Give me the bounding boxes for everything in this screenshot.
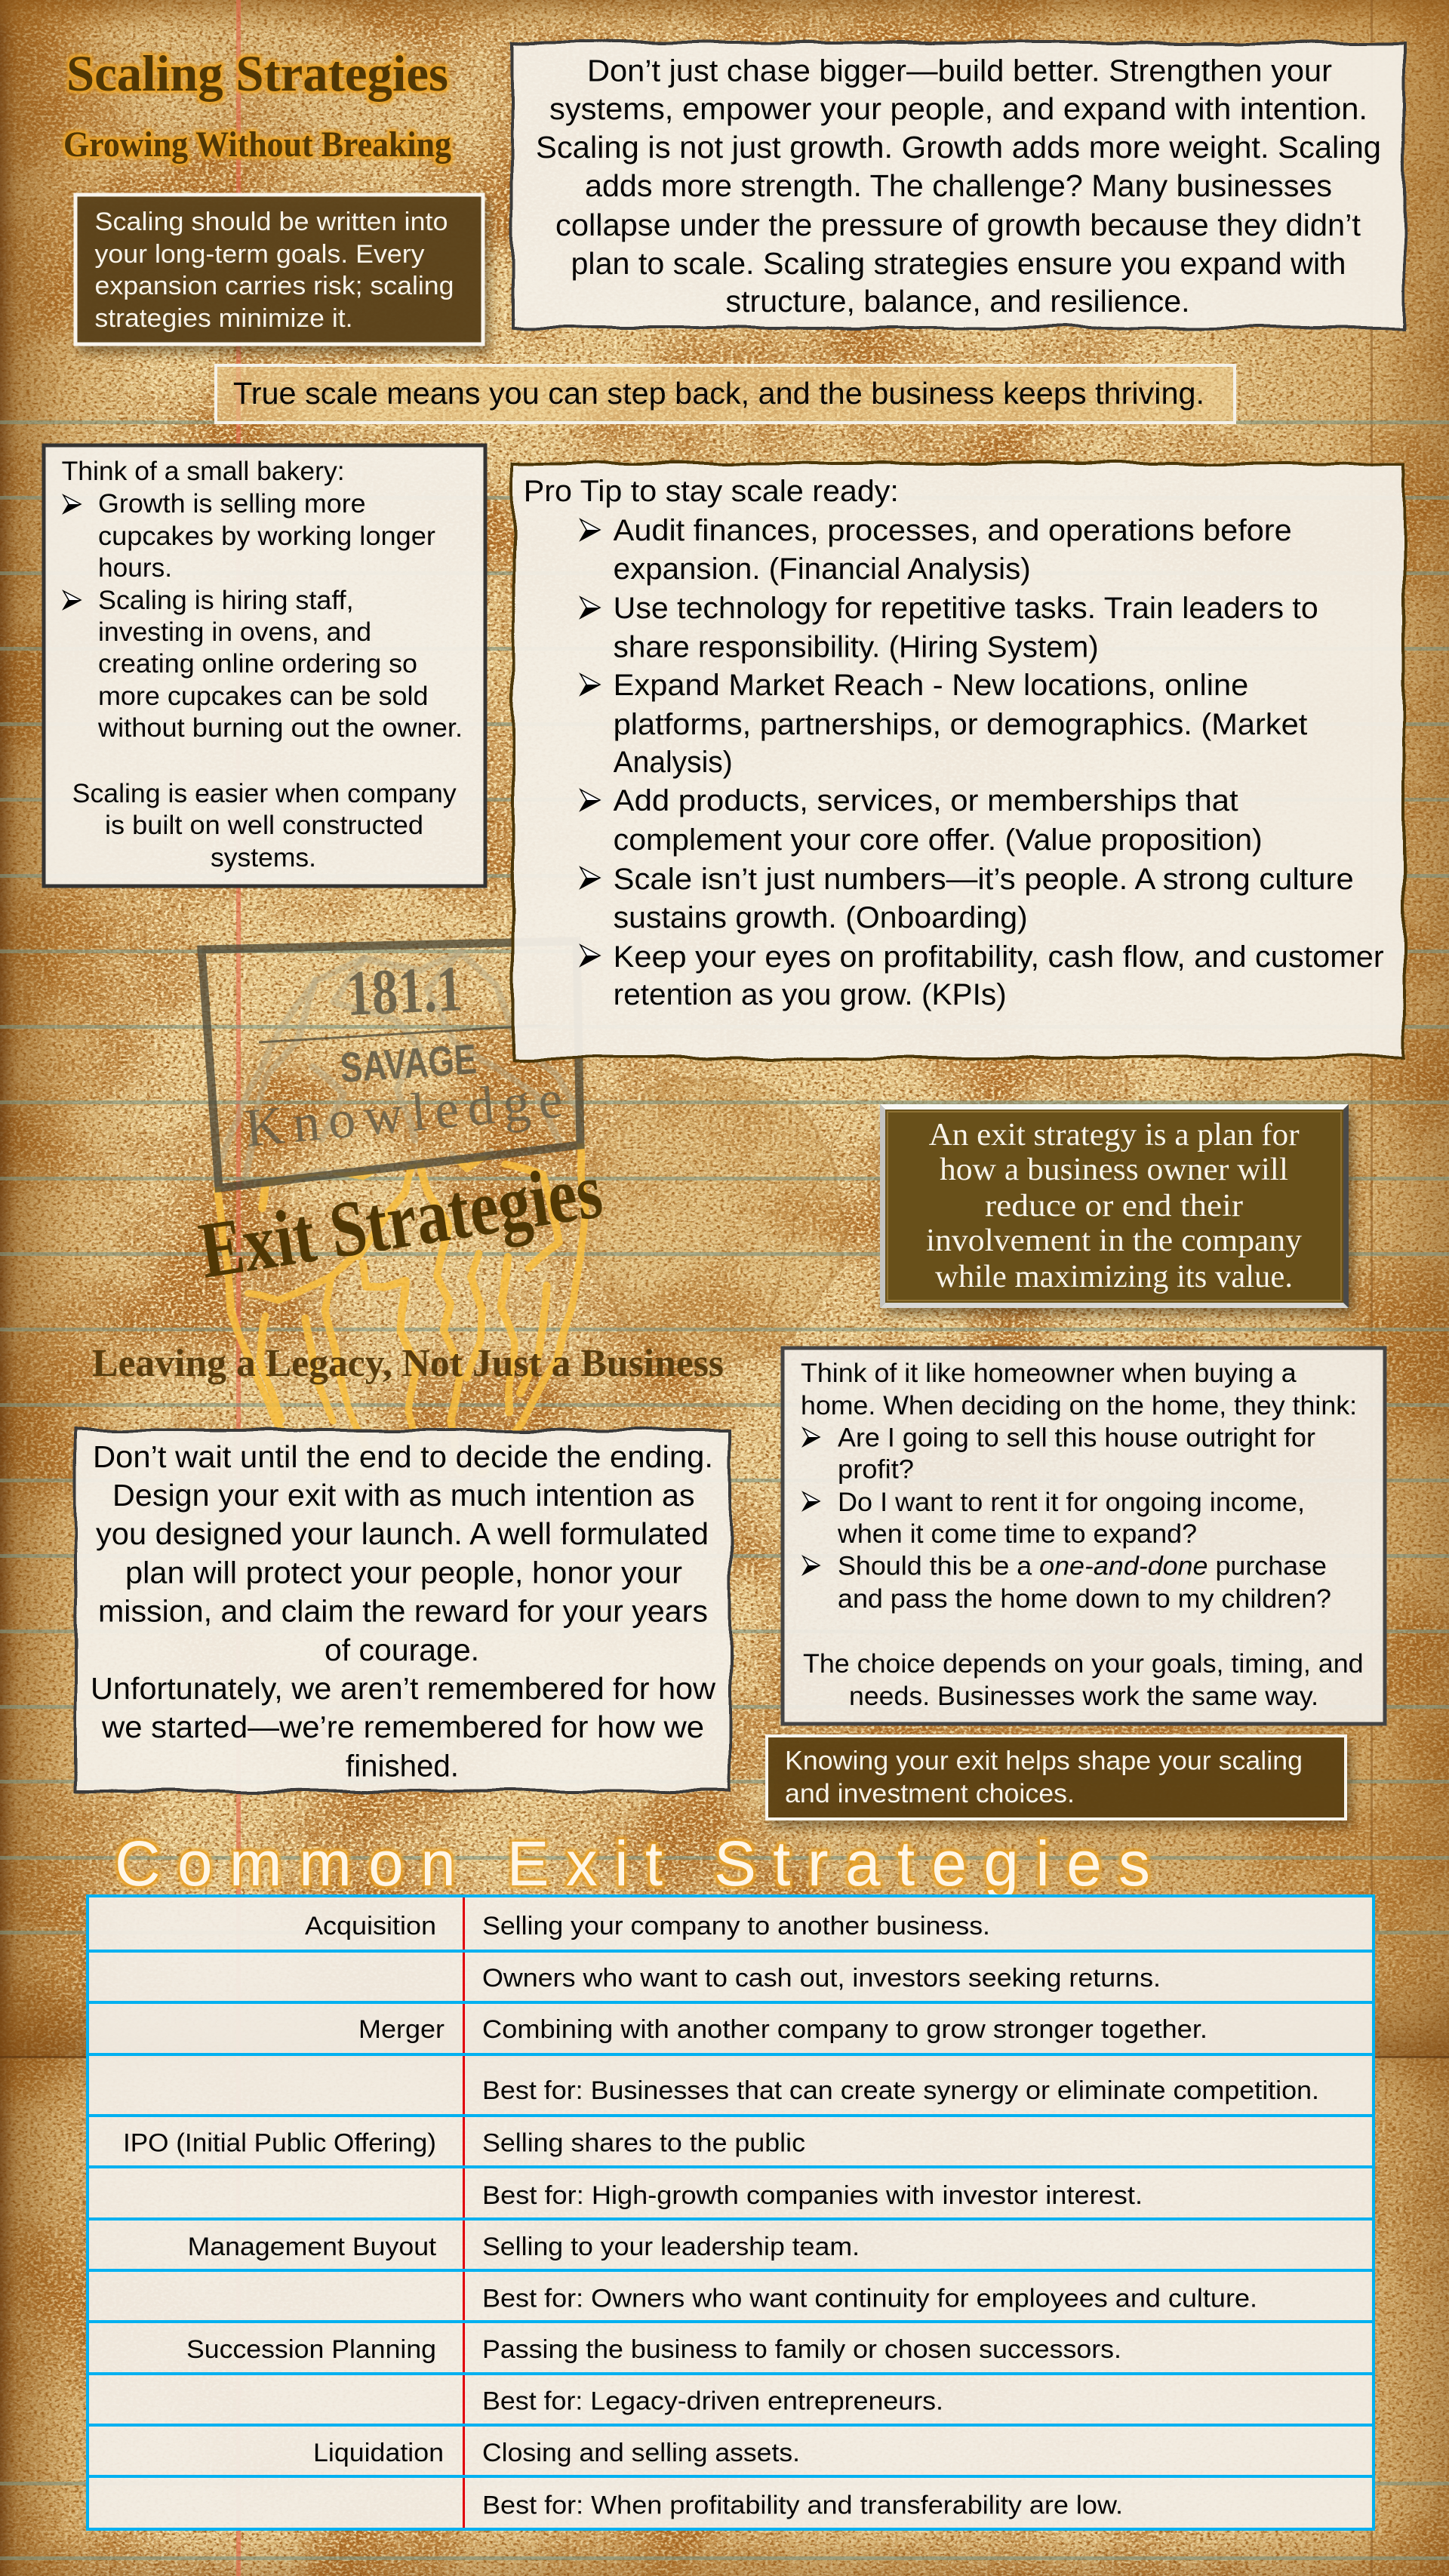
icon: brain <box>217 953 586 1472</box>
panel: intro text: systems, empower your people, and expand with intention. <box>549 91 1367 126</box>
panel: pro tip: retention as you grow. (KPIs) <box>614 978 1007 1011</box>
row: Management Buyout: Best for: Owners who want continuity for employees and culture. <box>482 2284 1257 2313</box>
panel: pro tip: sustains growth. (Onboarding) <box>614 901 1028 934</box>
title: Scaling Strategies: Scaling Strategies <box>66 45 448 102</box>
panel: homeowner analogy: needs. Businesses work the same way. <box>849 1682 1318 1711</box>
panel: intro text: plan to scale. Scaling strategies ensure you expand with <box>571 246 1346 281</box>
callout: exit strategy definition <box>880 1104 1349 1308</box>
coffee stain <box>583 1076 843 1362</box>
row: Acquisition: Owners who want to cash out, investors seeking returns. <box>482 1964 1161 1993</box>
panel: design your exit <box>75 1430 730 1791</box>
row: IPO: Best for: High-growth companies with investor interest. <box>482 2181 1143 2210</box>
row: IPO: IPO (Initial Public Offering) <box>123 2129 436 2158</box>
panel: pro tip: Analysis) <box>614 746 733 779</box>
icon: arrow bullet <box>580 519 600 540</box>
callout: scaling long-term goals: Scaling should be written into <box>95 208 448 236</box>
panel: design your exit: you designed your launch. A well formulated <box>96 1516 709 1551</box>
row: Management Buyout <box>188 2233 1257 2313</box>
panel: bakery example: cupcakes by working longer <box>98 522 435 551</box>
row: Merger: Best for: Businesses that can create synergy or eliminate competition. <box>482 2076 1319 2105</box>
icon: arrow bullet <box>803 1556 820 1574</box>
paper creases <box>762 0 1275 2574</box>
panel: bakery example: is built on well constructed <box>105 811 423 840</box>
panel: intro text: structure, balance, and resilience. <box>726 284 1189 319</box>
icon: arrow bullet <box>580 789 600 811</box>
panel: pro tip: share responsibility. (Hiring System) <box>614 631 1099 664</box>
panel: homeowner analogy: and pass the home down to my children? <box>838 1584 1331 1614</box>
panel: bakery example: Growth is selling more <box>98 489 366 519</box>
panel: bakery example: without burning out the owner. <box>97 713 463 743</box>
panel: homeowner analogy <box>783 1348 1385 1724</box>
callout: knowing your exit: Knowing your exit helps shape your scaling <box>785 1747 1303 1776</box>
row: Succession Planning: Succession Planning <box>186 2335 436 2364</box>
row: Succession Planning <box>186 2335 1121 2416</box>
subtitle: Growing Without Breaking: Growing Without Breaking <box>63 125 451 165</box>
panel: intro text: Don’t just chase bigger—build better. Strengthen your <box>587 53 1332 88</box>
panel: homeowner analogy: Think of it like homeowner when buying a <box>801 1359 1297 1388</box>
panel: design your exit: of courage. <box>325 1633 479 1667</box>
row: Liquidation: Best for: When profitability and transferability are low. <box>482 2491 1123 2520</box>
stamp: 181.1 Savage Knowledge: 181.1 <box>345 952 464 1029</box>
panel: pro tip: expansion. (Financial Analysis) <box>614 552 1031 586</box>
panel: intro text: adds more strength. The challenge? Many businesses <box>585 168 1332 203</box>
vertical fold <box>1371 0 1373 2576</box>
row: Succession Planning: Best for: Legacy-driven entrepreneurs. <box>482 2387 943 2416</box>
panel: bakery example: creating online ordering so <box>98 649 417 679</box>
callout: exit strategy definition: involvement in the company <box>926 1223 1302 1258</box>
stamp: 181.1 Savage Knowledge <box>202 941 580 1188</box>
row: Liquidation: Liquidation <box>313 2439 444 2467</box>
callout: knowing your exit <box>767 1736 1346 1819</box>
icon: arrow bullet <box>580 945 600 966</box>
banner: true scale: True scale means you can step back, and the business keeps thriving. <box>233 376 1204 411</box>
row: Acquisition: Selling your company to another business. <box>482 1912 990 1940</box>
callout: scaling long-term goals: strategies minimize it. <box>95 304 353 333</box>
panel: pro tip: Expand Market Reach - New locations, online <box>614 669 1248 702</box>
panel: pro tip <box>513 463 1404 1057</box>
panel: design your exit: plan will protect your people, honor your <box>125 1555 682 1590</box>
row: Liquidation <box>313 2439 1123 2520</box>
callout: exit strategy definition: while maximizing its value. <box>935 1260 1293 1294</box>
margin line <box>236 0 241 2576</box>
table: common exit strategies <box>86 1894 1375 2531</box>
panel: bakery example: Think of a small bakery: <box>62 457 345 486</box>
panel: design your exit: we started—we’re remembered for how we <box>101 1710 704 1744</box>
callout: knowing your exit: and investment choices. <box>785 1779 1075 1808</box>
panel: pro tip: Pro Tip to stay scale ready: <box>524 475 899 508</box>
row: Management Buyout: Selling to your leadership team. <box>482 2233 860 2261</box>
panel: homeowner analogy: profit? <box>838 1455 914 1485</box>
stamp: 181.1 Savage Knowledge: SAVAGE <box>339 1035 478 1091</box>
callout: scaling long-term goals <box>75 195 483 344</box>
row: Merger <box>358 2015 1319 2105</box>
heading: Exit Strategies: Exit Strategies <box>194 1146 608 1295</box>
panel: pro tip: Scale isn’t just numbers—it’s people. A strong culture <box>614 863 1354 896</box>
callout: exit strategy definition: An exit strategy is a plan for <box>929 1118 1300 1153</box>
callout: scaling long-term goals: expansion carries risk; scaling <box>95 272 454 300</box>
heading: Common Exit Strategies: Common Exit Strategies <box>115 1828 1150 1899</box>
panel: pro tip: Keep your eyes on profitability, cash flow, and customer <box>614 940 1384 974</box>
panel: pro tip: platforms, partnerships, or demographics. (Market <box>614 708 1307 741</box>
panel: bakery example: hours. <box>98 553 172 583</box>
subheading: Leaving a Legacy: Leaving a Legacy, Not Just a Business <box>92 1342 724 1385</box>
panel: homeowner analogy: when it come time to expand? <box>837 1519 1197 1549</box>
panel: design your exit: mission, and claim the reward for your years <box>98 1594 708 1629</box>
panel: bakery example: investing in ovens, and <box>98 617 371 647</box>
callout: exit strategy definition: reduce or end their <box>985 1189 1243 1223</box>
callout: scaling long-term goals: your long-term goals. Every <box>95 240 424 269</box>
panel: homeowner analogy: home. When deciding on the home, they think: <box>801 1391 1357 1420</box>
panel: homeowner analogy: Are I going to sell this house outright for <box>838 1423 1315 1453</box>
icon: arrow bullet <box>580 674 600 695</box>
panel: design your exit: Don’t wait until the end to decide the ending. <box>93 1439 713 1474</box>
panel: pro tip: Audit finances, processes, and operations before <box>614 514 1292 547</box>
panel: bakery example: more cupcakes can be sold <box>98 682 429 711</box>
panel: design your exit: finished. <box>346 1749 459 1784</box>
row: Merger: Merger <box>358 2015 445 2044</box>
stamp: 181.1 Savage Knowledge: Knowledge <box>242 1069 565 1159</box>
panel: homeowner analogy: The choice depends on your goals, timing, and <box>803 1649 1364 1679</box>
panel: bakery example: Scaling is hiring staff, <box>98 586 354 615</box>
icon: arrow bullet <box>803 1428 820 1446</box>
panel: intro text <box>513 43 1404 328</box>
panel: design your exit: Unfortunately, we aren’t remembered for how <box>91 1671 715 1706</box>
panel: intro text: Scaling is not just growth. Growth adds more weight. Scaling <box>536 130 1381 165</box>
banner: true scale <box>216 365 1235 423</box>
panel: intro text: collapse under the pressure of growth because they didn’t <box>555 208 1361 242</box>
panel: bakery example <box>44 445 485 886</box>
panel: design your exit: Design your exit with as much intention as <box>112 1478 695 1513</box>
panel: pro tip: Use technology for repetitive tasks. Train leaders to <box>614 592 1318 625</box>
panel: homeowner analogy: Should this be a one-and-done purchase <box>838 1552 1327 1581</box>
panel: pro tip: Add products, services, or memberships that <box>614 784 1238 817</box>
row: IPO <box>123 2129 1143 2210</box>
icon: arrow bullet <box>580 597 600 618</box>
row: Liquidation: Closing and selling assets. <box>482 2439 800 2467</box>
row: IPO: Selling shares to the public <box>482 2129 805 2158</box>
icon: arrow bullet <box>63 495 81 513</box>
panel: bakery example: systems. <box>211 843 316 873</box>
row: Acquisition <box>305 1912 1161 1993</box>
row: Management Buyout: Management Buyout <box>188 2233 437 2261</box>
panel: bakery example: Scaling is easier when company <box>72 779 457 808</box>
row: Acquisition: Acquisition <box>305 1912 436 1940</box>
callout: exit strategy definition: how a business owner will <box>940 1153 1288 1187</box>
icon: arrow bullet <box>63 591 81 609</box>
panel: homeowner analogy: Do I want to rent it for ongoing income, <box>838 1488 1305 1517</box>
panel: pro tip: complement your core offer. (Value proposition) <box>614 823 1263 857</box>
row: Merger: Combining with another company to grow stronger together. <box>482 2015 1208 2044</box>
icon: arrow bullet <box>580 867 600 888</box>
icon: arrow bullet <box>803 1492 820 1510</box>
row: Succession Planning: Passing the business to family or chosen successors. <box>482 2335 1121 2364</box>
